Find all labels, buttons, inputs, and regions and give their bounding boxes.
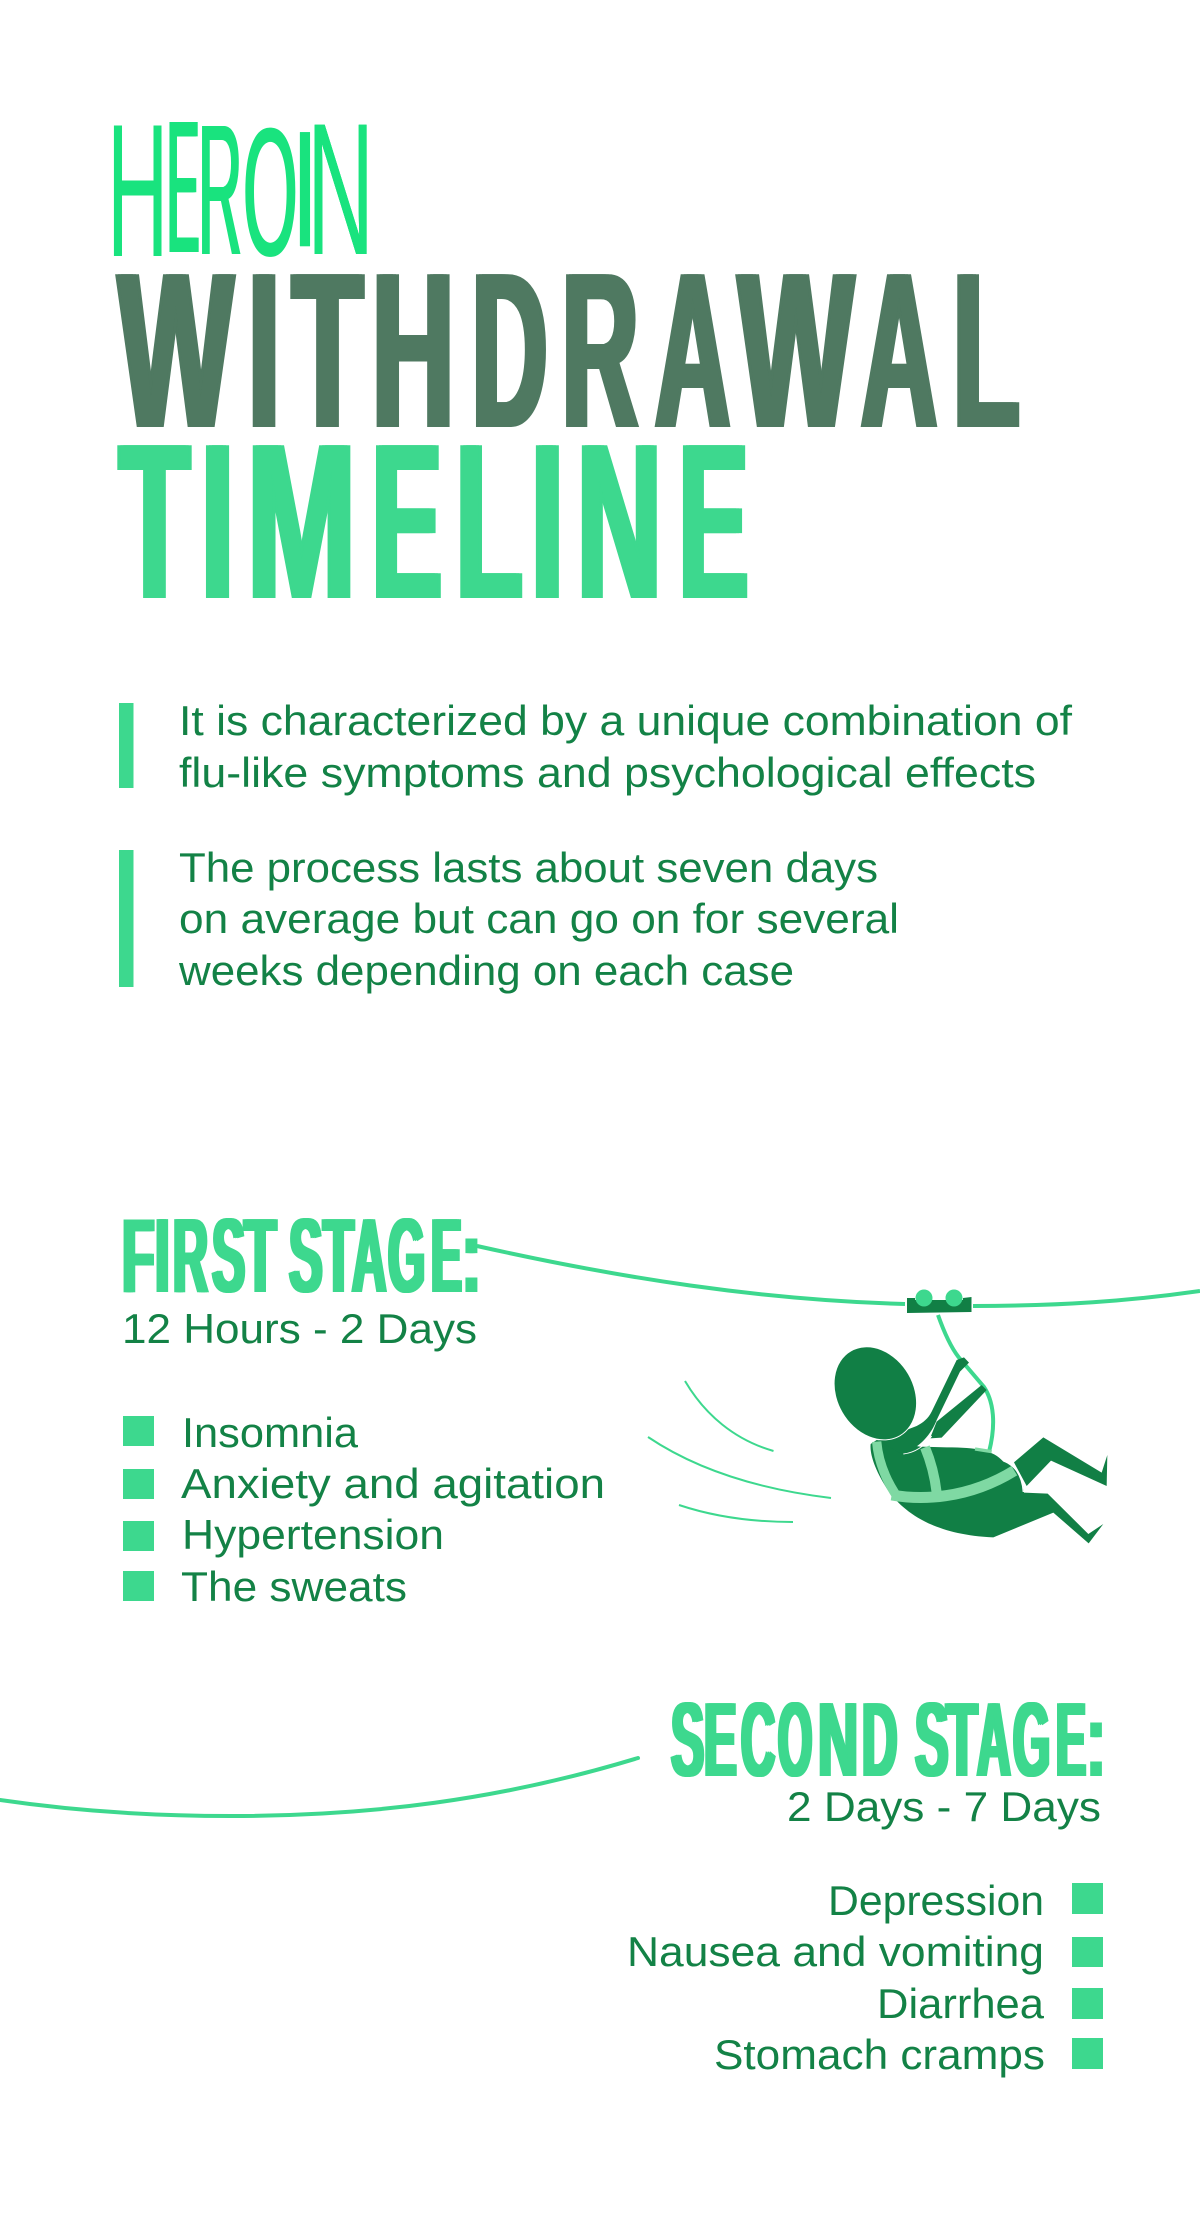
title word: heroin: I [290, 97, 320, 281]
second stage heading: T [946, 1681, 977, 1799]
second stage heading: : [1087, 1681, 1105, 1799]
first stage symptom list: Hypertension [182, 1511, 444, 1558]
title word: withdrawal: H [372, 227, 455, 475]
second stage heading: S [670, 1681, 704, 1799]
title word: heroin: N [307, 85, 374, 294]
title word: heroin: H [107, 85, 169, 296]
first stage heading: F [122, 1197, 155, 1315]
far leg [1014, 1437, 1107, 1486]
intro paragraph 2 [119, 844, 899, 994]
torso and near leg [871, 1440, 1103, 1543]
second stage heading: E [1056, 1681, 1086, 1799]
title word: heroin: E [167, 82, 199, 292]
second stage symptom list: Diarrhea [877, 1980, 1045, 2027]
title word: withdrawal: A [655, 227, 730, 475]
title word: heroin: R [198, 87, 243, 294]
icon: tether rope [938, 1315, 993, 1452]
intro paragraph 2: The process lasts about seven days [179, 844, 878, 891]
first stage heading [122, 1197, 481, 1315]
intro paragraph 1 [119, 697, 1072, 796]
arm outline [903, 1436, 932, 1454]
title word: timeline: E [679, 398, 748, 646]
icon: speed lines [648, 1381, 831, 1522]
title [107, 82, 1020, 646]
icon: person on zipline [818, 1332, 1107, 1543]
first stage heading: R [173, 1197, 208, 1315]
first stage symptom list: Anxiety and agitation [181, 1460, 605, 1507]
title word: timeline: I [200, 398, 234, 646]
second stage heading: G [1013, 1681, 1050, 1799]
title word: timeline: N [577, 398, 662, 646]
second stage duration: 2 Days - 7 Days [787, 1783, 1101, 1830]
hip highlight [1014, 1467, 1023, 1492]
second stage heading: O [778, 1681, 812, 1799]
title word: timeline: T [119, 398, 190, 646]
zipline cable: top [477, 1246, 1200, 1306]
title word: withdrawal [115, 227, 1020, 522]
title word: withdrawal: I [248, 227, 280, 475]
first stage heading: S [289, 1197, 322, 1315]
second stage heading: A [977, 1681, 1011, 1799]
zipline cable: bottom [0, 1758, 638, 1816]
second stage heading: N [818, 1681, 858, 1799]
harness [877, 1442, 1014, 1498]
icon: zipline trolley [907, 1290, 972, 1313]
intro paragraph 1: flu-like symptoms and psychological effects [179, 749, 1036, 796]
head [818, 1332, 933, 1455]
far arm [930, 1385, 987, 1438]
first stage symptom list: The sweats [181, 1563, 407, 1610]
title word: timeline [117, 398, 748, 646]
title word: timeline: L [456, 398, 522, 646]
first stage heading: T [323, 1197, 353, 1315]
intro paragraph 1: It is characterized by a unique combination of [179, 697, 1072, 744]
second stage heading [670, 1681, 1105, 1799]
first stage heading: G [388, 1197, 425, 1315]
first stage duration: 12 Hours - 2 Days [122, 1305, 477, 1352]
title word: heroin [107, 82, 630, 402]
second stage symptom list: Stomach cramps [714, 2031, 1045, 2078]
first stage heading: I [155, 1197, 170, 1315]
first stage heading: A [352, 1197, 386, 1315]
title word: timeline: M [247, 398, 356, 646]
second stage symptom list: Depression [828, 1877, 1044, 1924]
first stage heading: T [244, 1197, 276, 1315]
second stage heading: S [914, 1681, 948, 1799]
first stage symptom list: Insomnia [182, 1409, 359, 1456]
first stage heading: : [462, 1197, 481, 1315]
title word: timeline: I [530, 398, 563, 646]
title word: heroin: O [243, 91, 297, 294]
second stage heading: C [741, 1681, 775, 1799]
title word: withdrawal: D [472, 227, 547, 475]
second stage symptom list: Nausea and vomiting [627, 1928, 1044, 1975]
title word: withdrawal: L [953, 227, 1019, 475]
title word: withdrawal: T [292, 227, 363, 475]
near arm [878, 1357, 969, 1454]
intro paragraph 2: on average but can go on for several [179, 895, 899, 942]
second stage symptom list [627, 1877, 1103, 2078]
title word: withdrawal: W [118, 227, 234, 475]
title word: withdrawal: A [861, 227, 937, 475]
intro paragraph 2: weeks depending on each case [178, 947, 794, 994]
first stage heading: S [212, 1197, 245, 1315]
second stage heading: D [862, 1681, 897, 1799]
title word: timeline: E [372, 398, 441, 646]
second stage heading: E [704, 1681, 737, 1799]
first stage symptom list [123, 1409, 605, 1610]
title word: withdrawal: R [562, 227, 638, 475]
first stage heading: E [431, 1197, 461, 1315]
title word: withdrawal: W [738, 227, 853, 475]
